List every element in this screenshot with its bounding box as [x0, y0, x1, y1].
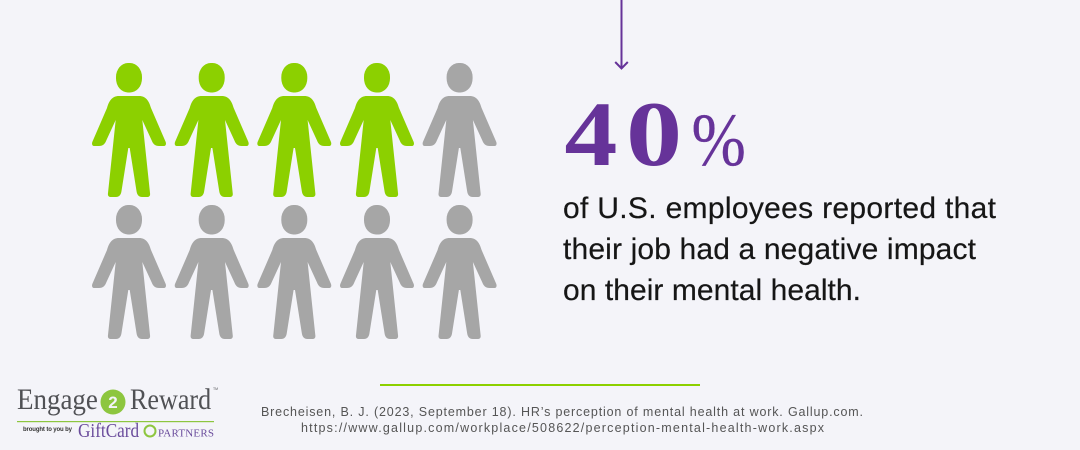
logo: Engage2Reward brought to you by GiftCard Partners: 2 [108, 393, 118, 412]
person 10 (grey) [423, 205, 497, 339]
green divider above citation [380, 384, 700, 386]
statement text: their job had a negative impact [563, 233, 977, 266]
logo: Engage2Reward brought to you by GiftCard Partners: Reward [130, 383, 211, 416]
citation: https://www.gallup.com/workplace/508622/perception-mental-health-work.aspx [301, 421, 825, 435]
logo: Engage2Reward brought to you by GiftCard Partners: brought to you by [23, 427, 73, 433]
logo: Engage2Reward brought to you by GiftCard Partners: TM [213, 387, 218, 391]
people pictogram: 4 of 10 highlighted [92, 63, 497, 339]
statistic: 40%: 4 [564, 84, 617, 185]
logo: Engage2Reward brought to you by GiftCard Partners: GiftCard [78, 420, 140, 442]
person 2 (green) [175, 63, 249, 197]
person 6 (grey) [92, 205, 166, 339]
statement text: of U.S. employees reported that [563, 192, 997, 225]
person 1 (green) [92, 63, 166, 197]
person 3 (green) [257, 63, 331, 197]
logo: Engage2Reward brought to you by GiftCard Partners [17, 383, 218, 442]
person 9 (grey) [340, 205, 414, 339]
statistic: 40% [564, 84, 746, 186]
statistic: 40%: % [692, 99, 746, 182]
arrow pointing down to statistic [615, 0, 628, 68]
statistic: 40%: 0 [626, 84, 682, 186]
statement text [563, 192, 997, 307]
logo: Engage2Reward brought to you by GiftCard Partners: Engage [17, 384, 98, 416]
logo: Engage2Reward brought to you by GiftCard Partners: PARTNERS [158, 428, 214, 440]
citation: Brecheisen, B. J. (2023, September 18). HR’s perception of mental health at work. Gallup.com. [261, 405, 863, 419]
person 7 (grey) [175, 205, 249, 339]
citation [261, 405, 863, 435]
person 5 (grey) [423, 63, 497, 197]
person 4 (green) [340, 63, 414, 197]
statement text: on their mental health. [563, 274, 861, 307]
person 8 (grey) [257, 205, 331, 339]
